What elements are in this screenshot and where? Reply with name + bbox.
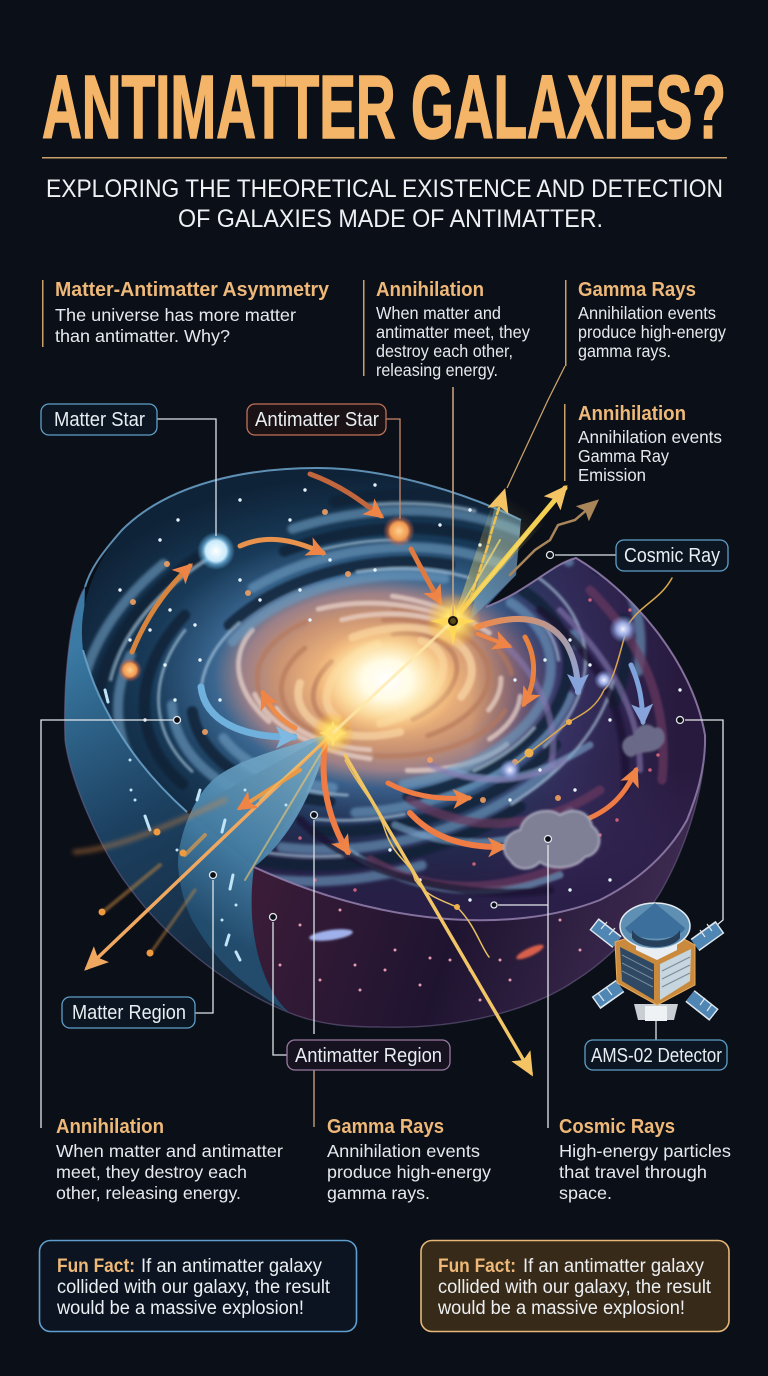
lower shell: antimatter hemisphere <box>252 740 705 1027</box>
text block: Matter-Antimatter Asymmetry <box>42 279 330 347</box>
subtitle <box>46 175 723 233</box>
disc rim outlines <box>83 468 521 812</box>
callout: fun fact orange: collided with our galaxy, the result <box>438 1277 712 1298</box>
galaxy core glow <box>320 632 454 730</box>
text block: Cosmic Rays bottom: space. <box>559 1183 612 1203</box>
icon: AMS-02 satellite <box>594 903 720 1021</box>
cosmic ray wave right <box>509 578 672 770</box>
callout: fun fact blue: would be a massive explosion! <box>56 1298 304 1319</box>
arrow: long gold lower-right <box>345 755 531 1073</box>
subtitle: EXPLORING THE THEORETICAL EXISTENCE AND DETECTION <box>46 175 723 203</box>
text block: Annihilation right: Emission <box>578 465 646 485</box>
label: Matter Star <box>41 404 157 435</box>
text block: Gamma Rays bottom: produce high-energy <box>327 1162 491 1182</box>
text block: Matter-Antimatter Asymmetry: Matter-Antimatter Asymmetry <box>55 279 330 301</box>
arrow: blue petal orange <box>240 770 300 808</box>
arrow: lower orange 2 <box>410 813 504 847</box>
galaxies in antimatter region <box>309 927 545 962</box>
arrow: matter star flow <box>240 539 323 553</box>
petal sparkles <box>105 690 286 960</box>
text block: Cosmic Rays bottom: that travel through <box>559 1162 707 1182</box>
text block: Annihilation top: antimatter meet, they <box>376 322 530 342</box>
star: violet 2 <box>594 670 614 690</box>
label: Cosmic Ray <box>616 540 728 571</box>
text block: Gamma Rays top: Gamma Rays <box>578 279 696 301</box>
cloud: lower <box>504 811 599 869</box>
leader lines <box>41 366 723 1128</box>
label: AMS-02 Detector <box>585 1040 727 1070</box>
label: AMS-02 Detector: AMS-02 Detector <box>591 1045 722 1067</box>
energy flow arrows <box>87 474 672 1073</box>
subtitle: OF GALAXIES MADE OF ANTIMATTER. <box>178 205 603 233</box>
burst glows and stars <box>118 515 637 781</box>
star: violet 1 <box>609 615 637 643</box>
stars field <box>120 485 680 900</box>
ray fan <box>453 490 575 621</box>
burst: upper annihilation <box>425 593 481 649</box>
arrow: orange down <box>324 745 348 852</box>
callout: fun fact orange: Fun Fact: <box>438 1256 516 1277</box>
text block: Cosmic Rays bottom <box>559 1116 731 1203</box>
arrow: blue right <box>631 665 643 722</box>
text block: Gamma Rays top: produce high-energy <box>578 322 726 342</box>
arrow: short orange <box>478 634 509 646</box>
label: Matter Region: Matter Region <box>72 1002 186 1024</box>
label: Antimatter Region: Antimatter Region <box>295 1045 442 1067</box>
cosmic ray dots <box>457 722 569 907</box>
arrow: top orange <box>310 474 381 516</box>
star: violet 3 <box>499 759 521 781</box>
yellow rays <box>453 530 530 621</box>
arrow: cosmic tan <box>510 502 596 575</box>
text block: Annihilation top <box>363 279 530 380</box>
text block: Annihilation bottom: Annihilation <box>56 1116 164 1138</box>
callout: fun fact blue: Fun Fact: <box>57 1256 135 1277</box>
text block: Gamma Rays bottom: Gamma Rays <box>327 1116 444 1138</box>
text block: Annihilation bottom: meet, they destroy each <box>56 1162 247 1182</box>
callout: fun fact blue: If an antimatter galaxy <box>141 1256 322 1277</box>
arrow: antimatter star inward <box>411 549 440 602</box>
text block: Matter-Antimatter Asymmetry: The universe has more matter <box>55 305 296 325</box>
text block: Annihilation right <box>564 403 722 485</box>
arrow: blue big <box>201 687 294 737</box>
callout: fun fact orange <box>421 1240 729 1332</box>
text block: Gamma Rays top: Annihilation events <box>578 303 716 323</box>
text block: Annihilation top: When matter and <box>376 303 501 323</box>
text block: Cosmic Rays bottom: Cosmic Rays <box>559 1116 675 1138</box>
star: orange <box>118 658 142 682</box>
label: Antimatter Star <box>247 404 386 435</box>
comet heads <box>102 832 183 953</box>
galaxy illustration <box>64 467 706 1028</box>
arrow: orange star to matter star <box>132 566 190 652</box>
callout: fun fact blue: collided with our galaxy, the result <box>57 1277 331 1298</box>
arrow: lower orange 3 <box>585 770 636 820</box>
text block: Annihilation bottom <box>56 1116 283 1203</box>
cosmic ray wave lower <box>345 760 489 957</box>
text block: Annihilation bottom: When matter and antimatter <box>56 1141 283 1161</box>
text block: Annihilation top: releasing energy. <box>376 360 498 380</box>
text block: Annihilation right: Annihilation events <box>578 427 722 447</box>
text block: Matter-Antimatter Asymmetry: than antimatter. Why? <box>55 326 230 346</box>
arrow: long gold lower-left <box>87 733 333 968</box>
cloud: upper right <box>622 725 665 757</box>
label: Antimatter Region <box>287 1040 450 1070</box>
text block: Gamma Rays bottom <box>327 1116 491 1203</box>
core beam <box>333 621 453 733</box>
text block: Annihilation right: Gamma Ray <box>578 446 669 466</box>
arrow: right orange curve <box>524 637 534 704</box>
label: Matter Star: Matter Star <box>54 409 145 431</box>
callout: fun fact blue <box>40 1240 356 1332</box>
antimatter region stars <box>280 910 580 1000</box>
text block: Annihilation right: Annihilation <box>578 403 686 425</box>
lower shell: matter hemisphere <box>65 587 379 1027</box>
text block: Annihilation top: Annihilation <box>376 279 484 301</box>
top right glass sliver <box>470 505 521 620</box>
text block: Gamma Rays bottom: gamma rays. <box>327 1183 430 1203</box>
text block: Gamma Rays bottom: Annihilation events <box>327 1141 480 1161</box>
blue petal <box>178 733 330 1013</box>
text block: Gamma Rays top <box>565 279 726 366</box>
text block: Annihilation bottom: other, releasing energy. <box>56 1183 241 1203</box>
burst: lower annihilation <box>311 711 355 755</box>
galaxy disc <box>82 469 704 920</box>
star: matter star <box>197 532 235 570</box>
text block: Gamma Rays top: gamma rays. <box>578 341 671 361</box>
label: Matter Region <box>62 997 195 1028</box>
outer comets <box>75 800 225 954</box>
arrow: double orange <box>263 693 295 728</box>
callout: fun fact orange: If an antimatter galaxy <box>523 1256 704 1277</box>
lower-left yellow rays <box>245 733 333 880</box>
text block: Cosmic Rays bottom: High-energy particles <box>559 1141 731 1161</box>
arrow: gold up <box>470 492 504 600</box>
label: Antimatter Star: Antimatter Star <box>255 409 379 431</box>
arrow: gold upper-right <box>453 488 565 621</box>
arrow: lower orange 1 <box>388 783 469 798</box>
clouds <box>504 725 665 869</box>
star: antimatter star <box>383 515 415 547</box>
callout: fun fact orange: would be a massive explosion! <box>437 1298 685 1319</box>
label: Cosmic Ray: Cosmic Ray <box>624 545 720 567</box>
text block: Annihilation top: destroy each other, <box>376 341 513 361</box>
arrow: annihilation arc <box>477 619 578 692</box>
